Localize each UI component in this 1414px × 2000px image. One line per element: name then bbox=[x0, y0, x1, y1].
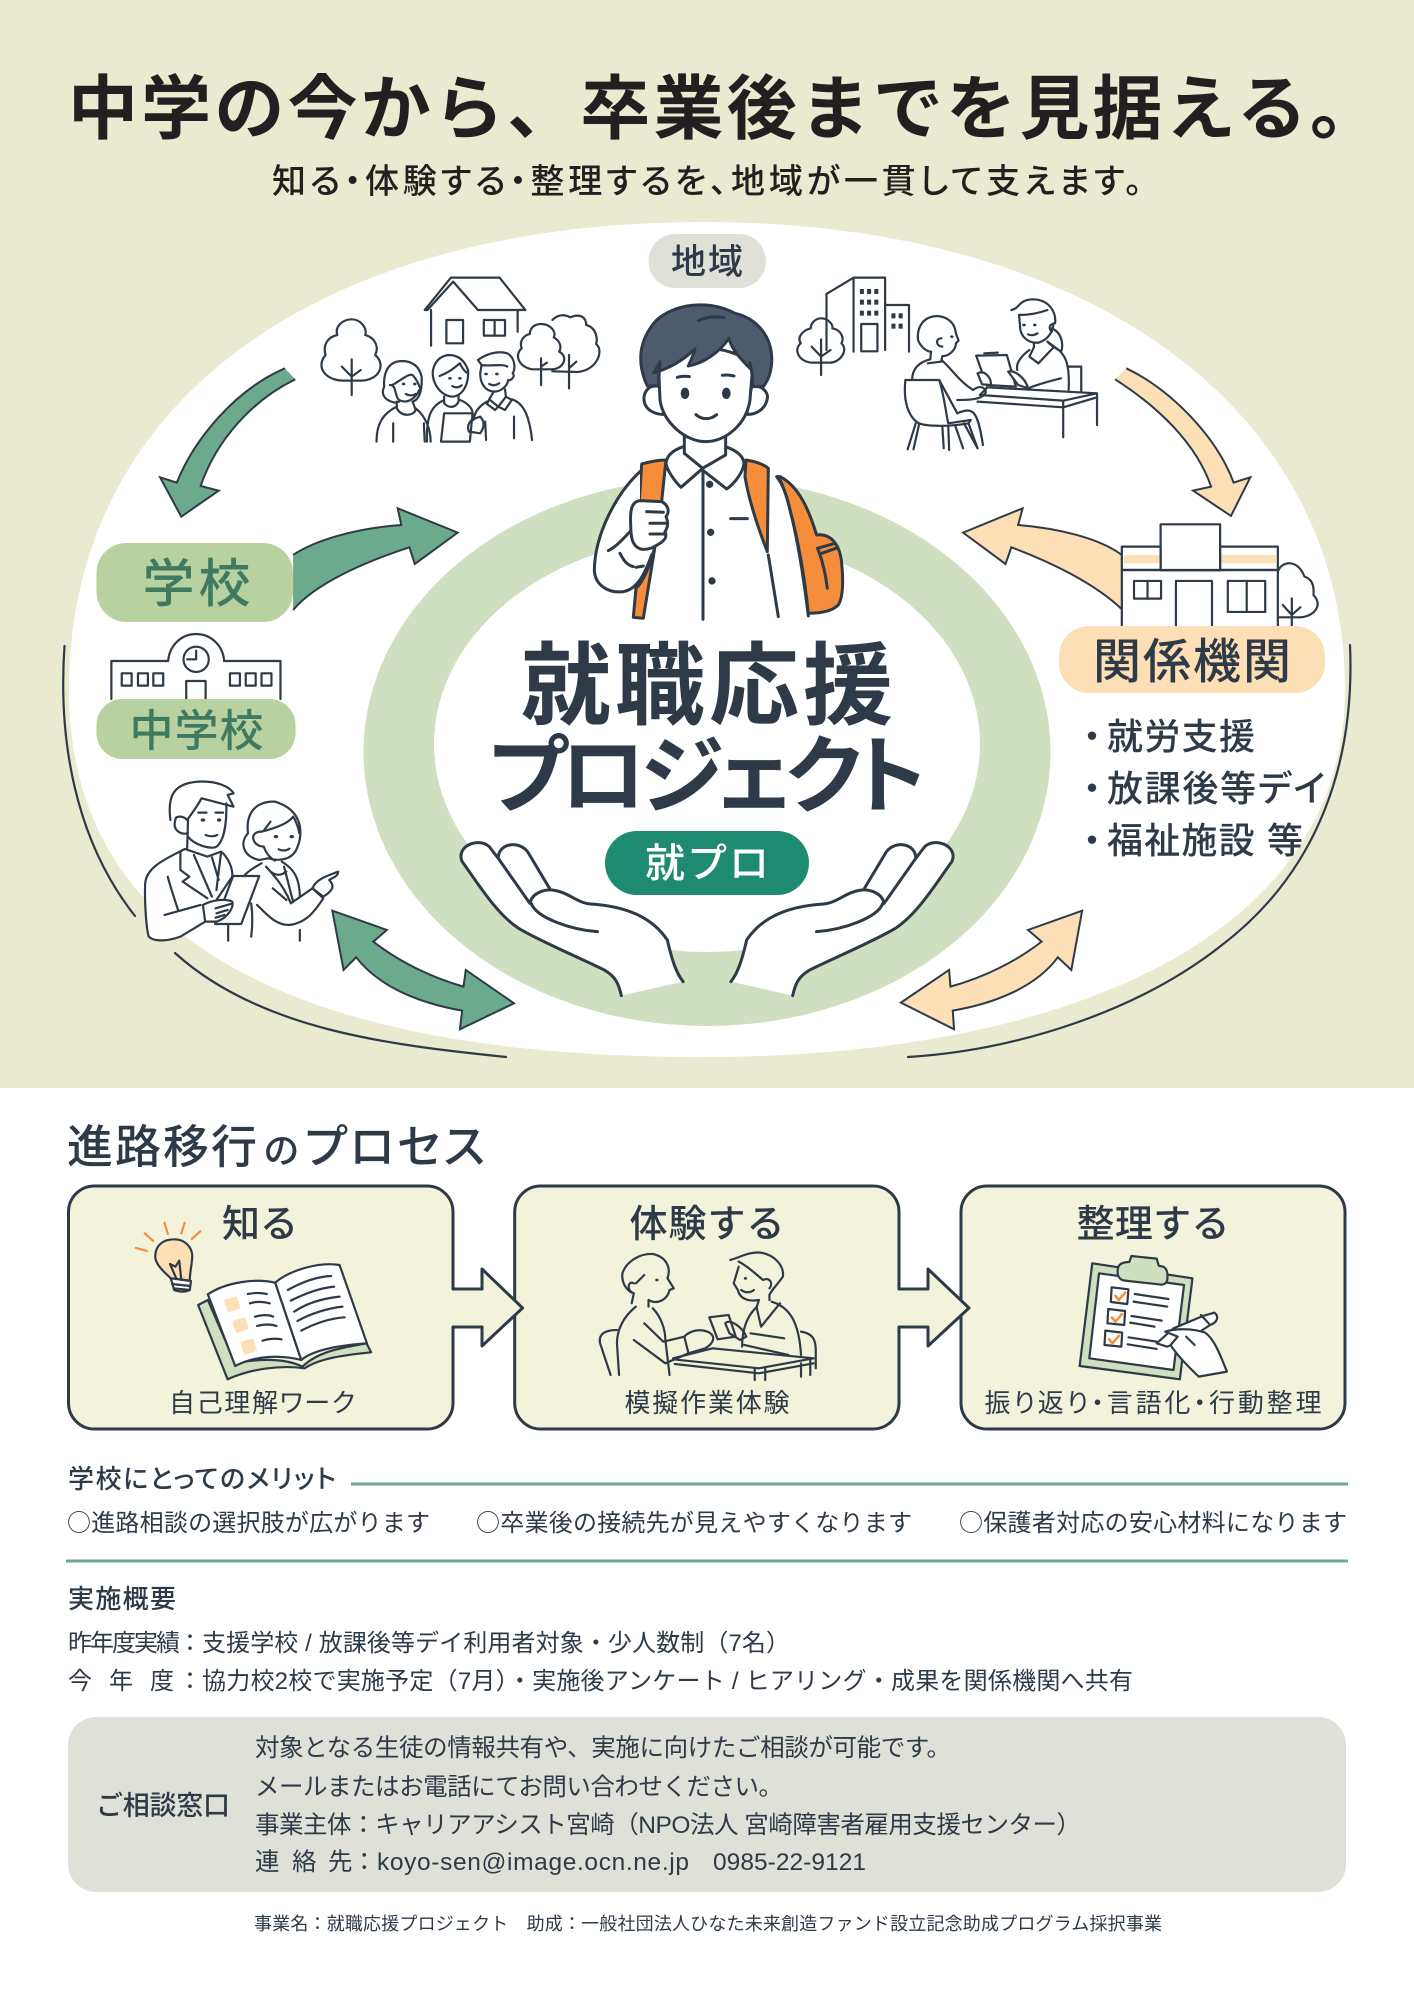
divider bbox=[351, 1482, 1348, 1486]
contact panel: 対象となる生徒の情報共有や、実施に向けたご相談が可能です。 bbox=[255, 1734, 951, 1762]
top background band bbox=[0, 0, 1414, 1088]
icon: lightbulb and book bbox=[136, 1223, 371, 1379]
merits list: ○卒業後の接続先が見えやすくなります bbox=[476, 1503, 912, 1538]
label: junior high school: 中学校 bbox=[130, 707, 264, 756]
overview lines: ： bbox=[178, 1668, 202, 1695]
icon: staff at table bbox=[673, 1253, 816, 1380]
icon: student with backpack bbox=[594, 305, 843, 619]
process card: experience: 模擬作業体験 bbox=[624, 1388, 790, 1418]
section heading: process: 進路移行 bbox=[67, 1121, 257, 1173]
agency list: ・ bbox=[1083, 820, 1101, 861]
pill: region: 地域 bbox=[671, 243, 743, 282]
contact panel: 絡 bbox=[292, 1848, 317, 1876]
icon: left hand bbox=[461, 843, 683, 996]
icon: office consultation bbox=[797, 278, 1097, 450]
contact panel: 先 bbox=[328, 1848, 352, 1876]
arrow: know to experience bbox=[451, 1269, 523, 1346]
center title bbox=[488, 637, 926, 825]
center title: 就職応援 bbox=[521, 637, 893, 737]
agency list: ・ bbox=[1083, 716, 1101, 757]
overview lines: 度 bbox=[150, 1668, 174, 1695]
process card: experience bbox=[515, 1186, 899, 1429]
section heading: process: の bbox=[264, 1130, 299, 1171]
overview lines: 年 bbox=[109, 1668, 133, 1695]
merits list bbox=[67, 1503, 1347, 1538]
contact panel: メールまたはお電話にてお問い合わせください。 bbox=[255, 1773, 783, 1801]
merits heading: 学校にとってのメリット bbox=[68, 1464, 336, 1494]
agency list bbox=[1083, 716, 1325, 861]
icon: school building bbox=[111, 634, 280, 699]
process card: know: 自己理解ワーク bbox=[169, 1388, 355, 1418]
center ring bbox=[364, 478, 1050, 1026]
process card: know bbox=[68, 1186, 453, 1429]
process card: know: 知る bbox=[222, 1204, 298, 1246]
arrow: region to agencies bbox=[1115, 368, 1250, 516]
merits list: ○保護者対応の安心材料になります bbox=[959, 1503, 1347, 1538]
arrow: school two-way bbox=[332, 911, 514, 1029]
process card: organize: 振り返り・言語化・行動整理 bbox=[984, 1388, 1322, 1418]
overview lines: 支援学校 / 放課後等デイ利用者対象・少人数制（7名） bbox=[202, 1630, 790, 1657]
icon: agency building bbox=[1122, 524, 1318, 626]
arrow: region to school bbox=[160, 368, 295, 517]
overview lines: 協力校2校で実施予定（7月）・実施後アンケート / ヒアリング・成果を関係機関へ共有 bbox=[202, 1668, 1133, 1695]
merits list: ○進路相談の選択肢が広がります bbox=[67, 1503, 430, 1538]
overview lines: 昨年度実績： bbox=[68, 1630, 202, 1657]
contact panel: ： bbox=[352, 1849, 376, 1876]
center title: プロジェクト bbox=[488, 730, 926, 825]
contact panel: 連 bbox=[255, 1848, 280, 1876]
title: 中学の今から、卒業後までを見据える。 bbox=[68, 70, 1380, 148]
overview lines bbox=[68, 1630, 1133, 1695]
arrow: experience to organize bbox=[897, 1269, 969, 1346]
divider bbox=[66, 1560, 1348, 1562]
contact panel: 0985-22-9121 bbox=[713, 1849, 866, 1876]
contact panel: koyo-sen@image.ocn.ne.jp bbox=[377, 1849, 689, 1876]
footer note: 事業名：就職応援プロジェクト 助成：一般社団法人ひなた未来創造ファンド設立記念助成プログラム採択事業 bbox=[254, 1914, 1162, 1934]
section heading: process: プロセス bbox=[305, 1121, 485, 1173]
icon: right hand bbox=[731, 843, 953, 996]
label: school: 学校 bbox=[142, 556, 250, 614]
section heading: process bbox=[67, 1121, 485, 1173]
pill: short name: 就プロ bbox=[645, 842, 769, 886]
icon: family and house bbox=[321, 278, 599, 442]
arrow: agencies two-way bbox=[901, 911, 1082, 1029]
contact panel: 事業主体：キャリアアシスト宮崎（NPO法人 宮崎障害者雇用支援センター） bbox=[255, 1811, 1081, 1839]
outer thin arcs bbox=[63, 645, 1350, 1057]
agency list: 就労支援 bbox=[1107, 716, 1255, 757]
subtitle: 知る・体験する・整理するを、地域が一貫して支えます。 bbox=[272, 163, 1142, 201]
agency list: ・ bbox=[1083, 768, 1101, 809]
process card: organize bbox=[961, 1186, 1345, 1429]
label: junior high school bbox=[96, 699, 296, 759]
pill: region bbox=[648, 234, 766, 288]
process card: experience: 体験する bbox=[630, 1204, 784, 1246]
label: related agencies: 関係機関 bbox=[1093, 636, 1291, 689]
icon: trainee at table bbox=[600, 1254, 713, 1375]
agency list: 福祉施設 等 bbox=[1107, 820, 1303, 861]
contact panel: ご相談窓口 bbox=[96, 1791, 230, 1821]
white oval panel bbox=[69, 222, 1345, 1057]
arrow: agencies to center bbox=[963, 508, 1122, 609]
icon: teachers bbox=[145, 782, 338, 941]
overview heading: 実施概要 bbox=[68, 1584, 176, 1614]
process card: organize: 整理する bbox=[1076, 1204, 1230, 1246]
agency list: 放課後等デイ bbox=[1107, 768, 1325, 809]
pill: short name bbox=[605, 831, 809, 895]
label: related agencies bbox=[1059, 626, 1325, 693]
label: school bbox=[96, 543, 293, 622]
arrow: school to center bbox=[293, 508, 458, 610]
contact panel bbox=[68, 1717, 1346, 1892]
icon: clipboard and hand bbox=[1080, 1256, 1227, 1379]
overview lines: 今 bbox=[68, 1668, 92, 1695]
